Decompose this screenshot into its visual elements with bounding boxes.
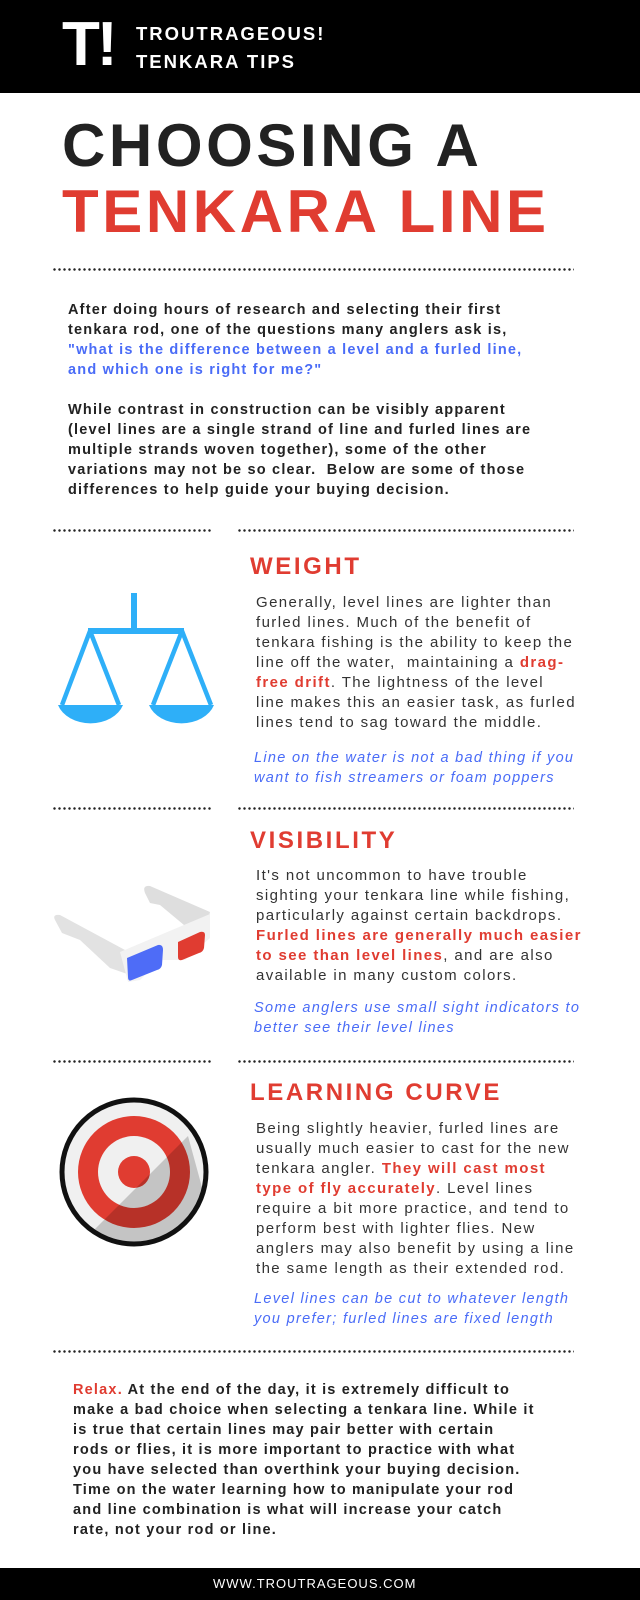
weight text: furled lines. Much of the benefit of: [256, 614, 532, 631]
conclusion text: rods or flies, it is more important to practice with what: [73, 1442, 515, 1458]
visibility tip: Some anglers use small sight indicators to: [254, 1000, 580, 1016]
heading: visibility: VISIBILITY: [250, 827, 397, 854]
intro text: "what is the difference between a level and a furled line,: [68, 342, 522, 358]
title: TENKARA LINE: [62, 178, 550, 245]
intro text: variations may not be so clear. Below are some of those: [68, 462, 525, 478]
conclusion text: Relax. At the end of the day, it is extremely difficult to: [73, 1382, 510, 1398]
icon: 3D glasses: [54, 886, 210, 982]
visibility tip: better see their level lines: [254, 1020, 455, 1036]
conclusion text: make a bad choice when selecting a tenkara line. While it: [73, 1402, 535, 1418]
heading: learning curve: LEARNING CURVE: [250, 1079, 502, 1106]
intro text: differences to help guide your buying decision.: [68, 482, 450, 498]
intro text: and which one is right for me?": [68, 362, 322, 378]
icon: scale: [58, 593, 214, 724]
weight text: free drift. The lightness of the level: [256, 674, 544, 691]
heading: weight: WEIGHT: [250, 553, 362, 580]
weight text: tenkara fishing is the ability to keep the: [256, 634, 573, 651]
footer: WWW.TROUTRAGEOUS.COM: [213, 1576, 416, 1591]
footer: [0, 1568, 640, 1600]
intro text: After doing hours of research and selecting their first: [68, 302, 501, 318]
weight tip: [254, 750, 574, 786]
brand text: [136, 23, 325, 72]
learning curve tip: [253, 1291, 569, 1327]
logo T!: T!: [62, 10, 115, 79]
visibility text: [256, 867, 582, 984]
learning curve text: perform best with lighter flies. New: [256, 1220, 536, 1237]
weight text: line makes this an easier task, as furled: [256, 694, 576, 711]
weight text: line off the water, maintaining a drag-: [256, 654, 564, 671]
learning curve text: anglers may also benefit by using a line: [256, 1240, 575, 1257]
learning curve text: Being slightly heavier, furled lines are: [256, 1120, 560, 1137]
weight text: lines tend to sag toward the middle.: [256, 714, 542, 731]
brand text: TROUTRAGEOUS!: [136, 23, 325, 44]
icon: target: [60, 1098, 208, 1246]
visibility text: It's not uncommon to have trouble: [256, 867, 528, 884]
brand text: TENKARA TIPS: [136, 51, 296, 72]
intro text: While contrast in construction can be visibly apparent: [68, 402, 506, 418]
intro text: multiple strands woven together), some of the other: [68, 442, 487, 458]
learning curve text: tenkara angler. They will cast most: [256, 1160, 546, 1177]
weight text: Generally, level lines are lighter than: [256, 594, 552, 611]
intro text: (level lines are a single strand of line and furled lines are: [68, 422, 531, 438]
learning curve text: the same length as their extended rod.: [256, 1260, 565, 1277]
title: [62, 112, 550, 245]
intro text: tenkara rod, one of the questions many anglers ask is,: [68, 322, 508, 338]
conclusion text: is true that certain lines may pair better with certain: [73, 1422, 494, 1438]
conclusion text: and line combination is what will increase your catch: [73, 1502, 502, 1518]
conclusion text: rate, not your rod or line.: [73, 1522, 277, 1538]
conclusion text: [73, 1382, 535, 1538]
header bar: [0, 0, 640, 93]
conclusion text: you have selected than overthink your buying decision.: [73, 1462, 521, 1478]
learning curve text: type of fly accurately. Level lines: [256, 1180, 533, 1197]
learning curve tip: Level lines can be cut to whatever length: [254, 1291, 569, 1307]
visibility text: sighting your tenkara line while fishing,: [256, 887, 570, 904]
learning curve tip: you prefer; furled lines are fixed length: [254, 1311, 554, 1327]
learning curve text: usually much easier to cast for the new: [256, 1140, 570, 1157]
conclusion text: Time on the water learning how to manipulate your rod: [73, 1482, 514, 1498]
visibility text: Furled lines are generally much easier: [256, 927, 582, 944]
weight text: [256, 594, 576, 731]
visibility text: particularly against certain backdrops.: [256, 907, 562, 924]
visibility text: to see than level lines, and are also: [256, 947, 554, 964]
weight tip: want to fish streamers or foam poppers: [254, 770, 555, 786]
title: CHOOSING A: [62, 112, 482, 179]
learning curve text: require a bit more practice, and tend to: [256, 1200, 570, 1217]
visibility text: available in many custom colors.: [256, 967, 518, 984]
visibility tip: [254, 1000, 580, 1036]
weight tip: Line on the water is not a bad thing if you: [254, 750, 574, 766]
learning curve text: [256, 1120, 575, 1277]
intro text: [68, 302, 531, 498]
